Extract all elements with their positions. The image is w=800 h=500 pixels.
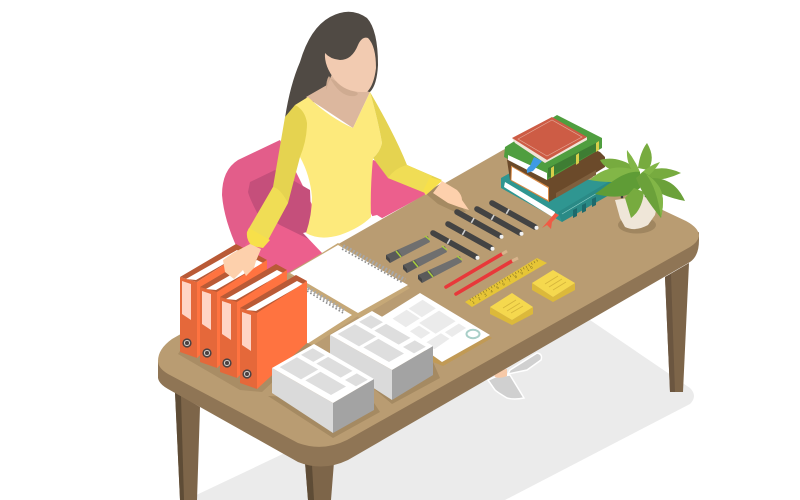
woman's feet under the desk xyxy=(488,353,542,399)
notebook upper xyxy=(288,243,410,318)
chair xyxy=(222,140,425,280)
binder 2 xyxy=(200,254,267,368)
green book xyxy=(504,115,602,180)
clipboard document xyxy=(380,293,492,366)
stack of books xyxy=(501,115,618,229)
paper stack back xyxy=(330,311,440,404)
brown book xyxy=(507,135,605,202)
woman's right arm and hand xyxy=(370,92,469,210)
woman's neck xyxy=(306,72,370,128)
woman's yellow top xyxy=(295,92,382,238)
desk edge xyxy=(158,232,699,467)
potted plant xyxy=(590,143,685,234)
leaves xyxy=(590,143,685,218)
binder shadow xyxy=(178,320,312,392)
pens xyxy=(433,203,538,260)
highlighter markers xyxy=(386,236,462,283)
red pencils xyxy=(446,251,518,294)
desk top xyxy=(158,146,699,447)
blue bookmark xyxy=(527,157,542,173)
floor shadow xyxy=(190,316,694,500)
paper stack front xyxy=(268,344,380,438)
binder 4 xyxy=(240,275,307,389)
woman's face xyxy=(325,38,376,96)
teal book xyxy=(501,173,618,222)
woman's right arm shadow on desk xyxy=(425,184,466,212)
sticky note left xyxy=(490,293,533,325)
red book xyxy=(512,117,587,163)
woman's left arm and hand xyxy=(223,105,307,279)
binder 3 xyxy=(220,264,287,378)
red bookmark xyxy=(542,213,559,229)
desk legs xyxy=(175,263,689,500)
pot xyxy=(615,193,660,229)
pot shadow xyxy=(618,216,656,234)
yellow ruler xyxy=(465,258,547,307)
sticky note right xyxy=(532,270,575,302)
woman's white trousers xyxy=(303,215,385,254)
woman's hair xyxy=(285,12,378,118)
notebook lower xyxy=(290,278,358,346)
binder 1 xyxy=(180,244,247,358)
yellow ruler: 1 2 3 4 5 6 7 8 9 10 xyxy=(471,264,534,305)
